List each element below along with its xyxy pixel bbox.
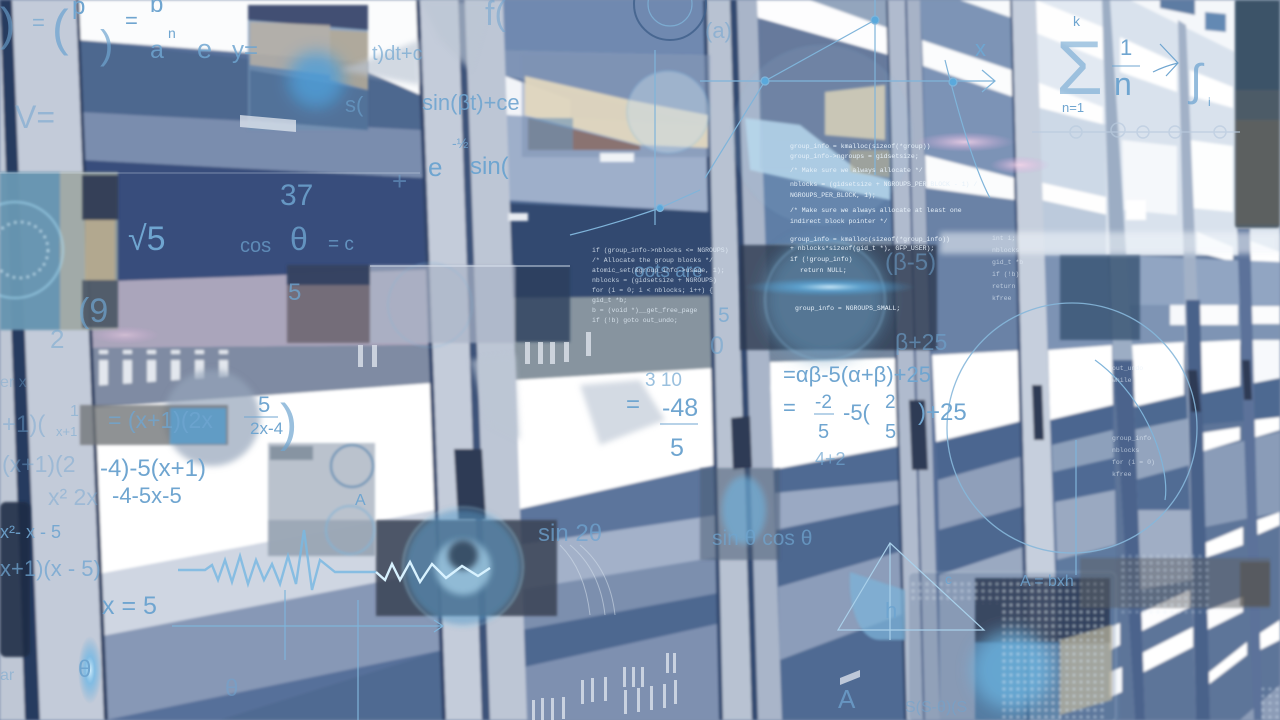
math formulas: = [626, 391, 640, 418]
large circle outline [947, 303, 1197, 553]
math formulas: x [975, 36, 986, 61]
math formulas: θ [290, 221, 308, 257]
math formulas: sin( [470, 153, 509, 180]
code listing: narrow right column: nblocks [1112, 447, 1139, 454]
math formulas: -5( [843, 400, 871, 425]
math formulas: 1 [70, 403, 79, 420]
door handles [454, 360, 1252, 520]
code listing: narrow right column: int i; [992, 235, 1015, 242]
math formulas: n [168, 25, 176, 41]
math formulas: s( [345, 92, 364, 117]
math formulas: c [945, 571, 952, 587]
math formulas: ( [52, 0, 69, 56]
math formulas: -4-5x-5 [112, 483, 182, 508]
math formulas: 3 10 [645, 370, 682, 391]
rack 5 [1035, 0, 1120, 720]
inset panel: left scope [0, 172, 118, 330]
horizontal haze band [0, 172, 1280, 267]
code listing: right: + nblocks*sizeof(gid_t *), GFP_USER); [790, 245, 934, 252]
rack 1 [75, 0, 445, 720]
code listing: narrow right column: for (i = 0) [1112, 459, 1155, 466]
code listing: centre: if (group_info->nblocks <= NGROUPS) [592, 247, 729, 254]
inset panel: photo top right [732, 20, 912, 225]
math formulas: -½ [452, 135, 469, 151]
math formulas: (a) [705, 18, 732, 43]
inset panel: grey dial card [268, 443, 375, 556]
math formulas: sin 2θ [538, 520, 602, 547]
rack 3 [755, 0, 905, 720]
math formulas: β+25 [895, 329, 947, 355]
math formulas: = [125, 8, 138, 33]
code listing: centre [592, 247, 729, 324]
math formulas: (x+1)(2 [2, 451, 76, 477]
inset panel: far right edge [1235, 0, 1280, 228]
code listing: narrow right column: if (!b) [992, 271, 1019, 278]
inset panel: photo top centre [508, 55, 710, 221]
code listing: centre: for (i = 0; i < nblocks; i++) { [592, 287, 713, 294]
math formulas: V= [15, 99, 55, 135]
code listing: centre: b = (void *)__get_free_page [592, 307, 697, 314]
code listing: right: nblocks = (gidsetsize + NGROUPS_PER_BLOCK - 1) / [790, 181, 977, 188]
math formulas: a [150, 36, 164, 64]
code listing: centre: nblocks = (gidsetsize + NGROUPS) [592, 277, 717, 284]
math formulas: x²- x - 5 [0, 522, 61, 542]
math formulas: = [783, 395, 796, 420]
math formulas: -2 [815, 392, 832, 413]
math formulas: 4+2 [815, 449, 846, 469]
math formulas: S(S-θ)(S [905, 699, 967, 716]
math formulas: )+25 [918, 399, 967, 426]
math formulas: A = bxh [1020, 573, 1074, 590]
inset panel: world map with dots [908, 572, 1116, 720]
code listing: right: group_info = NGROUPS_SMALL; [795, 305, 900, 312]
inset panel: upper left picture [248, 5, 368, 130]
math formulas: θ [225, 675, 238, 702]
code listing: narrow right column [992, 235, 1155, 478]
rack 4 [920, 0, 1030, 720]
math formulas: 2x-4 [250, 419, 283, 438]
math formulas: ∫ [1187, 56, 1205, 105]
inset panel: middle wide [287, 263, 570, 347]
math formulas: k [1073, 13, 1081, 29]
math formulas: ar [0, 667, 15, 684]
math formulas: 2 [885, 392, 896, 413]
math formulas: x+1 [56, 424, 77, 439]
math formulas: 5 [818, 421, 829, 443]
code listing: narrow right column: group_info [1112, 435, 1151, 442]
math formulas: x² 2x [48, 484, 98, 510]
code listing: narrow right column: nblocks [992, 247, 1019, 254]
molecule chain [1032, 123, 1240, 138]
inset panel: lower right strip [1080, 555, 1280, 720]
code listing: right: return NULL; [800, 267, 847, 274]
graph axes [172, 0, 1178, 720]
math formulas: n [1114, 66, 1132, 102]
code listing: centre: gid_t *b; [592, 297, 627, 304]
inset panel: grey strip with lens [80, 370, 260, 466]
math formulas: x+1)(x - 5) [0, 556, 101, 581]
triangle diagram [838, 543, 984, 640]
math formulas: 5 [288, 279, 301, 306]
code listing: right: /* Make sure we always allocate at least one [790, 207, 962, 214]
math formulas: Σ [1056, 26, 1103, 111]
math formulas: 5 [885, 421, 896, 443]
code listing: right: group_info = kmalloc(sizeof(*group)) [790, 143, 930, 150]
math formulas: 2 [50, 324, 64, 354]
math formulas: = c [328, 234, 354, 255]
inset panel: waveform scope [376, 507, 557, 627]
math formulas: ) [100, 23, 113, 67]
math formulas: 5 [718, 304, 730, 327]
world map smudge [340, 0, 665, 445]
code listing: narrow right column: kfree [1112, 471, 1132, 478]
code listing: centre: atomic_set(&group_info->usage, 1); [592, 267, 725, 274]
code listing: right: /* Make sure we always allocate */ [790, 167, 923, 174]
math formulas: 1 [1120, 35, 1132, 60]
code listing: narrow right column: out_undo [1112, 365, 1143, 372]
code listing: right: group_info->ngroups = gidsetsize; [790, 153, 919, 160]
math formulas: 0 [710, 332, 724, 360]
math formulas: x = 5 [102, 592, 157, 620]
math formulas: e [428, 152, 442, 182]
math formulas: t)dt+c [372, 43, 423, 65]
inset panel: lower left dark [0, 502, 30, 657]
math formulas: (9 [78, 292, 108, 330]
math formulas: -4)-5(x+1) [100, 455, 206, 482]
glow flares [78, 132, 1050, 704]
math formulas: er x [0, 374, 27, 391]
waveform [178, 530, 490, 590]
math formulas: = (x+1)(2x [108, 407, 213, 433]
math formulas: 5 [670, 434, 684, 462]
math formulas: y= [232, 37, 258, 64]
math formulas: A [838, 684, 856, 714]
math formulas: θ [78, 656, 91, 683]
math formulas: e [197, 34, 212, 64]
math formulas: (β-5) [885, 249, 936, 276]
math formulas: n=1 [1062, 100, 1084, 115]
bar marks along the lower panels [240, 115, 860, 720]
code listing: narrow right column: gid_t *b [992, 259, 1023, 266]
math formulas: oots are [634, 261, 703, 282]
math formulas: +1)( [2, 411, 45, 438]
code listing: right: group_info = kmalloc(sizeof(*group_info)) [790, 236, 950, 243]
far left rack [0, 0, 40, 720]
code listing: narrow right column: kfree [992, 295, 1012, 302]
math formulas: sin θ cos θ [712, 527, 812, 550]
far racks [1106, 0, 1280, 720]
math formulas: 37 [280, 179, 313, 212]
inset panel: glowing dark scope [740, 238, 937, 362]
code listing: centre: if (!b) goto out_undo; [592, 317, 678, 324]
math formulas: -48 [662, 394, 698, 422]
math formulas: i [1208, 95, 1211, 109]
math formulas: =αβ-5(α+β)+25 [783, 362, 931, 387]
quarter-circle radar [850, 572, 905, 640]
code listing: right [790, 143, 977, 312]
math formulas: ) [280, 394, 297, 452]
inset panel: small dark centre [700, 468, 780, 560]
code listing: centre: /* Allocate the group blocks */ [592, 257, 713, 264]
math formulas: 5 [258, 392, 270, 417]
math formulas: A [355, 492, 366, 509]
math formulas: + [392, 166, 407, 196]
code listing: right: if (!group_info) [790, 256, 852, 263]
math formulas: h [885, 598, 897, 623]
code listing: narrow right column: return [992, 283, 1016, 290]
inset panel: right dark [1060, 255, 1140, 340]
code listing: right: indirect block pointer */ [790, 218, 888, 225]
curved light arcs [560, 545, 615, 615]
math formulas: cos [240, 235, 271, 257]
math formulas: = [32, 10, 45, 35]
math formulas: √5 [128, 220, 166, 258]
code listing: narrow right column: while [1112, 377, 1132, 384]
rack 2 [500, 0, 725, 720]
code listing: right: NGROUPS_PER_BLOCK, 1); [790, 192, 876, 199]
math formulas: sin(βt)+ce [422, 90, 520, 115]
